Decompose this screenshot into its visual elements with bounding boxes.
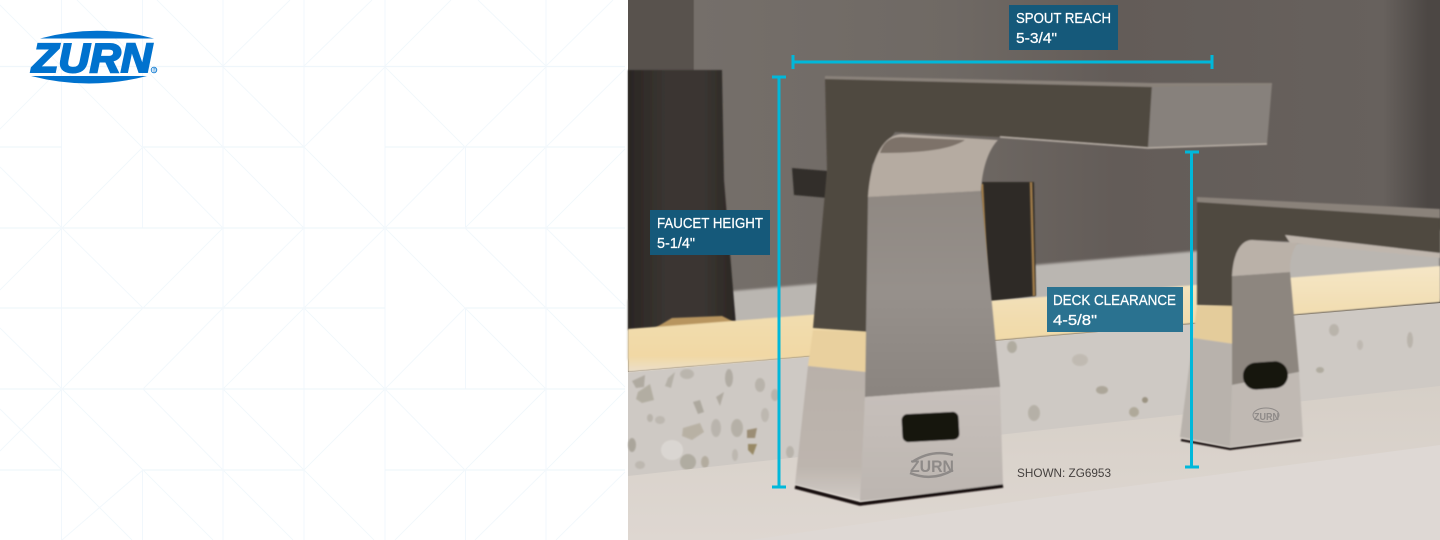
label: spout reach: SPOUT REACH	[1016, 10, 1111, 27]
base front	[860, 387, 1003, 501]
caption: model shown: SHOWN: ZG6953	[1017, 466, 1111, 480]
mirrored faucet left	[628, 70, 736, 330]
arc highlight	[868, 134, 998, 197]
terrazzo stones	[628, 324, 1413, 470]
mirror counter reflection	[628, 230, 1440, 360]
gold glint	[655, 316, 736, 328]
photo: faucet on vanity	[628, 0, 1440, 540]
logo: Zurn: ZURN	[31, 35, 153, 81]
side lower	[795, 366, 866, 500]
label: faucet height: FAUCET HEIGHT	[657, 215, 763, 232]
label: deck clearance	[1047, 287, 1183, 332]
dimension line: spout reach	[793, 55, 1212, 69]
second faucet	[1180, 197, 1440, 449]
main faucet	[795, 76, 1272, 504]
mirrored faucet rear	[982, 182, 1036, 302]
dimension line: deck clearance	[1185, 152, 1199, 467]
left face dark	[813, 78, 1152, 332]
front face	[865, 191, 1000, 397]
countertop	[628, 386, 1440, 540]
spout top	[825, 76, 1272, 87]
spout end	[1148, 84, 1272, 148]
side strip	[808, 330, 866, 372]
label: deck clearance: DECK CLEARANCE	[1053, 292, 1176, 309]
dimension line: faucet height	[772, 77, 786, 487]
label: faucet height: 5-1/4"	[657, 235, 695, 252]
lit strip	[628, 266, 1440, 372]
spout bottom edge	[1000, 137, 1267, 148]
gold trim	[982, 182, 1034, 302]
mirrored handle	[792, 168, 828, 198]
label: deck clearance: 4-5/8"	[1053, 312, 1097, 329]
label: spout reach	[1009, 5, 1118, 50]
sensor	[901, 412, 960, 442]
basin	[750, 445, 1440, 540]
black foot	[795, 486, 1003, 504]
etched logo small	[1253, 408, 1279, 423]
logo: Zurn: ®	[153, 67, 157, 74]
label: spout reach: 5-3/4"	[1016, 30, 1057, 47]
terrazzo backsplash	[628, 303, 1440, 478]
etched logo small: ZURN	[1254, 412, 1279, 423]
label: faucet height	[650, 210, 770, 255]
etched logo: ZURN	[910, 457, 954, 476]
background grid pattern	[0, 0, 625, 540]
